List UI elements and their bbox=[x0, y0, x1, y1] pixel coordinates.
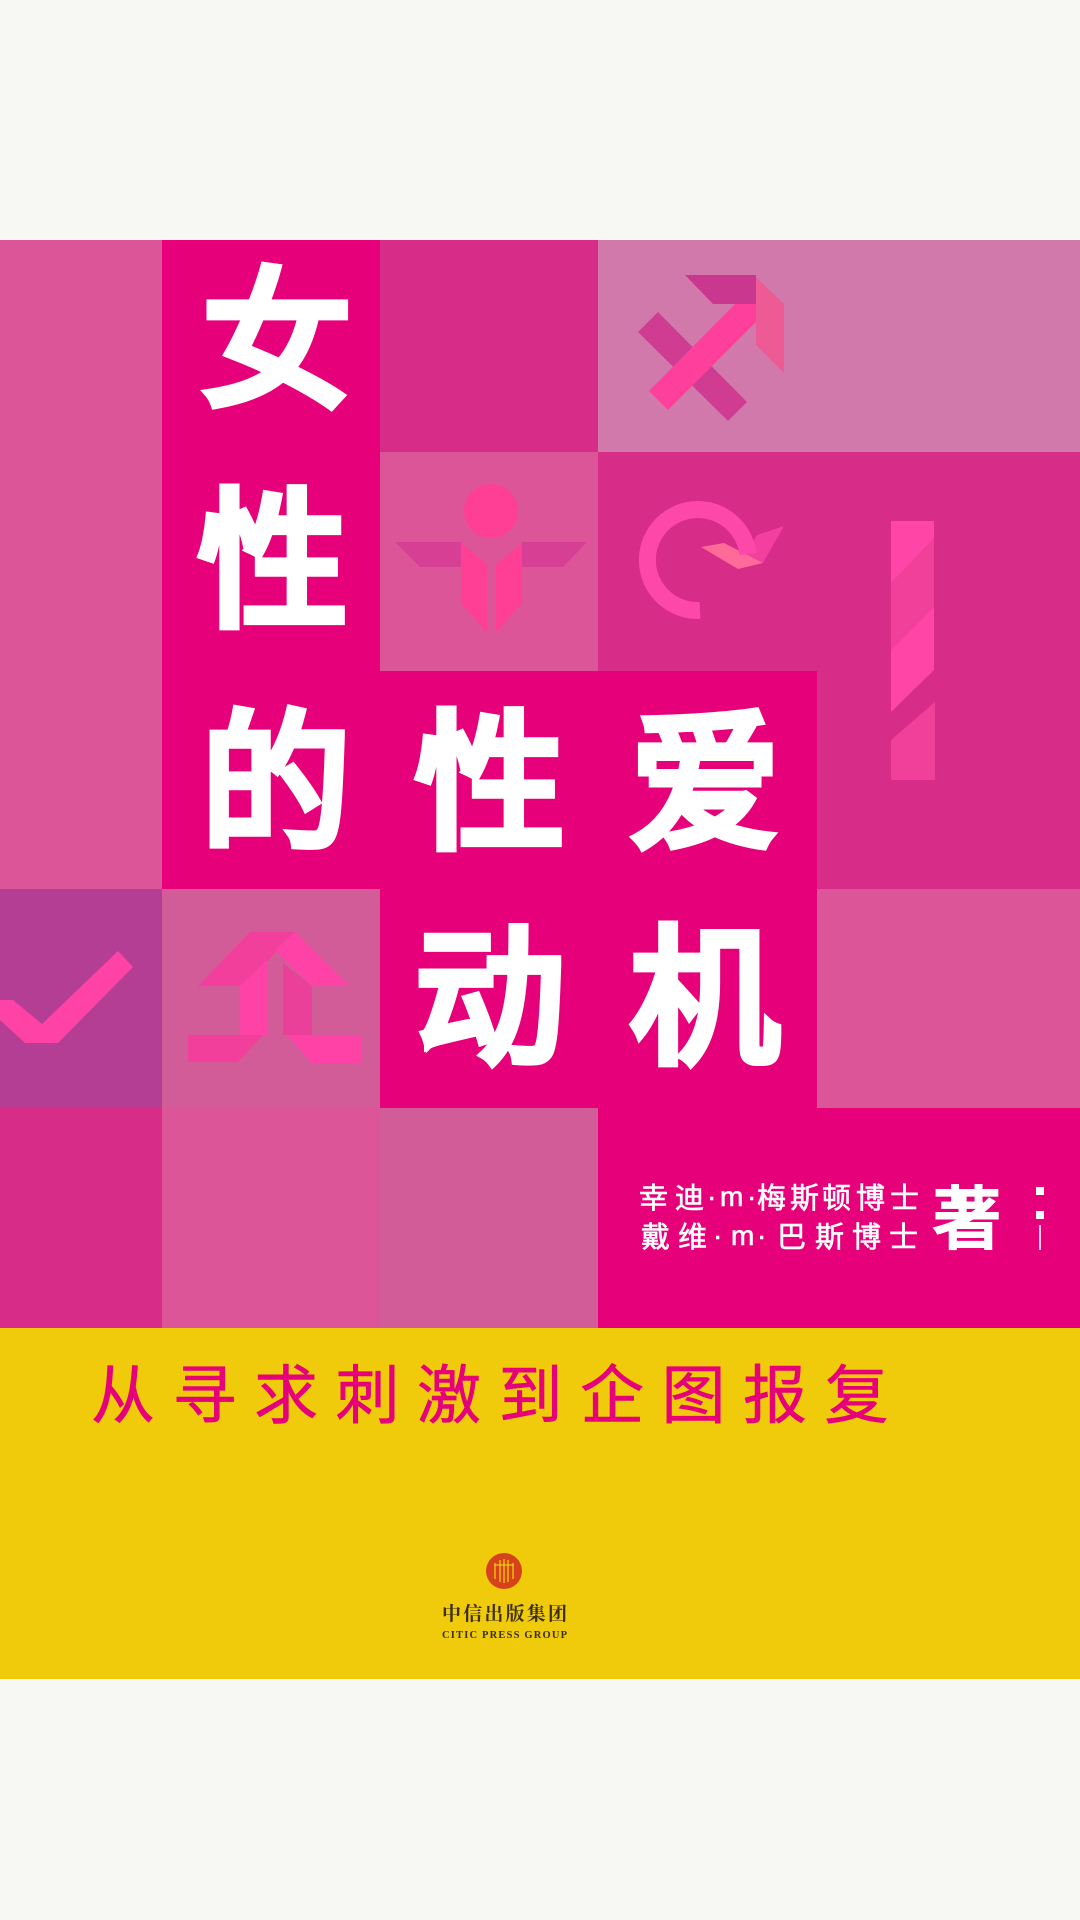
subtitle: 从寻求刺激到企图报复 bbox=[91, 1345, 888, 1437]
icon: person with wings bbox=[395, 484, 587, 633]
title: 性 bbox=[198, 478, 348, 646]
author credit mark: 著 bbox=[933, 1164, 1001, 1263]
panel: yellow band bbox=[0, 1328, 1080, 1679]
title: 的 bbox=[201, 700, 351, 868]
authors: 戴维巴斯博士 bbox=[641, 1221, 918, 1254]
authors: ·m· bbox=[713, 1220, 766, 1251]
panel: pink colour block grid bbox=[0, 240, 1080, 1328]
icon: circular arrow bbox=[647, 510, 784, 611]
authors bbox=[639, 1181, 919, 1254]
icon: sagittarius arrow bbox=[638, 275, 784, 421]
icon: up arrow bbox=[188, 932, 362, 1063]
title: 动 bbox=[415, 915, 565, 1083]
icon: check mark bbox=[0, 951, 133, 1043]
cropped mark bbox=[1036, 1187, 1044, 1250]
title: 机 bbox=[630, 915, 780, 1083]
title: 性 bbox=[415, 700, 565, 868]
title: 女 bbox=[202, 258, 352, 426]
authors: 幸迪梅斯顿博士 bbox=[639, 1182, 919, 1215]
publisher name chinese: 中信出版集团 bbox=[442, 1599, 567, 1626]
title: 爱 bbox=[630, 700, 780, 868]
icon: publisher logo bbox=[486, 1553, 522, 1589]
publisher name english: CITIC PRESS GROUP bbox=[442, 1630, 568, 1641]
title bbox=[198, 258, 780, 1083]
icon: exclamation bar bbox=[891, 521, 935, 780]
authors: ·m· bbox=[707, 1181, 756, 1212]
